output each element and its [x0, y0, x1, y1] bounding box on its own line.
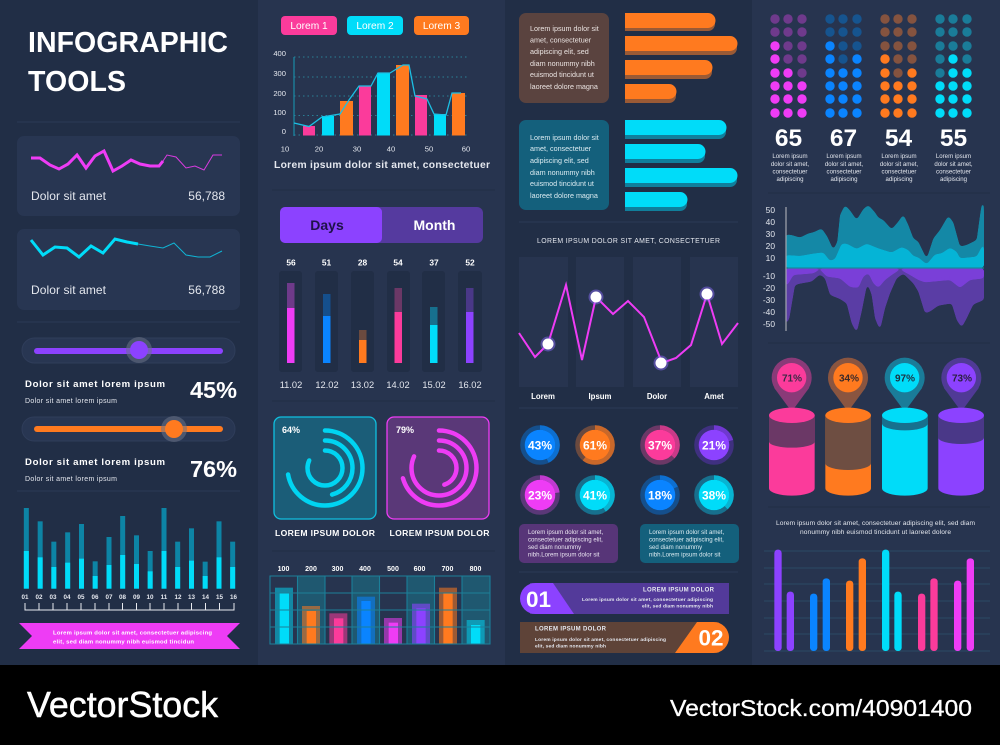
cylinder: 73%	[938, 358, 984, 496]
combo chart: 50	[425, 144, 433, 154]
percentage circles: 61%	[583, 438, 607, 452]
area chart: 30	[766, 229, 775, 239]
banner 02	[520, 622, 729, 653]
panel: orange text box: diam nonummy nibh	[530, 59, 595, 68]
text box: purple: consectetuer adipiscing elit,	[528, 536, 603, 544]
combo chart: 10	[281, 144, 289, 154]
bar chart: sixteen cyan bars	[21, 508, 237, 610]
bar chart: sixteen cyan bars: 04	[63, 594, 71, 601]
legend buttons: Lorem 2	[356, 21, 394, 32]
cylinder: 97%: 97%	[895, 374, 915, 384]
radial chart card: 79%: 79%	[396, 425, 414, 435]
bar chart: sixteen cyan bars: 13	[188, 594, 195, 601]
daily progress bars: 14.02	[386, 380, 410, 390]
bar chart: sixteen cyan bars: 08	[119, 594, 126, 601]
daily progress bars: 37	[429, 258, 439, 268]
panel: magenta sparkline card	[17, 136, 240, 216]
line chart with highlighted points	[519, 238, 738, 401]
text box: teal: consectetuer adipiscing elit,	[649, 536, 724, 544]
area chart: -40	[763, 307, 775, 317]
panel: cyan sparkline card: Dolor sit amet	[31, 283, 107, 297]
line chart with highlighted points: Amet	[704, 392, 724, 401]
daily progress bars: 54	[393, 258, 403, 268]
dot matrix: 55: dolor sit amet,	[934, 161, 973, 168]
panel: orange text box: laoreet dolore magna	[530, 82, 598, 91]
area chart	[763, 203, 984, 333]
panel: orange text box: euismod tincidunt ut	[530, 70, 594, 79]
dot matrix: 54	[880, 14, 918, 183]
grid bar chart: 200	[305, 566, 317, 573]
panel: cyan text box: euismod tincidunt ut	[530, 179, 594, 188]
grid bar chart: 300	[332, 566, 343, 573]
cylinder: 34%: 34%	[839, 374, 859, 384]
dot matrix: 55: adipiscing	[940, 176, 967, 183]
ribbon banner: elit, sed diam nonummy nibh euismod tincidun	[53, 640, 194, 646]
combo chart: 200	[273, 89, 286, 98]
percentage circles: 37%	[648, 438, 672, 452]
panel: orange slider: Dolor sit amet lorem ipsum	[25, 457, 165, 468]
dot matrix: 67: Lorem ipsum	[826, 153, 862, 160]
dot matrix: 54: dolor sit amet,	[880, 161, 918, 168]
grid bar chart: 700	[442, 566, 453, 573]
dot matrix: 65: Lorem ipsum	[772, 153, 808, 160]
dot matrix: 65: 65	[775, 125, 802, 152]
text box: teal	[640, 524, 739, 563]
dot matrix: 54: Lorem ipsum	[881, 153, 917, 160]
combo chart: 100	[273, 108, 286, 117]
dot matrix: 55: 55	[940, 125, 967, 152]
title: TOOLS	[28, 66, 126, 98]
bar chart: sixteen cyan bars: 11	[161, 594, 168, 601]
combo chart: 0	[282, 127, 286, 136]
line chart with highlighted points: Ipsum	[589, 392, 612, 401]
legend buttons: Lorem 1	[290, 21, 328, 32]
panel: orange text box: adipiscing elit, sed	[530, 47, 589, 56]
bar chart: sixteen cyan bars: 03	[49, 594, 57, 601]
bar chart: cyan horizontal bars	[625, 120, 738, 211]
line chart with highlighted points: Lorem	[531, 392, 555, 401]
daily progress bars: 28	[358, 258, 367, 268]
footer bar: VectorStock.com/40901400	[670, 695, 972, 721]
panel: purple slider: Dolor sit amet lorem ipsum	[25, 398, 117, 405]
grid bar chart	[270, 566, 490, 644]
radial chart card: 64%: 64%	[282, 425, 300, 435]
dot matrix: 67: consectetuer	[827, 168, 861, 176]
cylinder: 71%	[769, 358, 815, 496]
dot matrix: 65	[770, 14, 809, 183]
panel: cyan sparkline card: 56,788	[188, 283, 225, 297]
panel: cyan text box: amet, consectetuer	[530, 144, 592, 153]
toggle: days and month: Days	[310, 217, 344, 233]
panel: orange slider: 76%	[190, 456, 237, 482]
line chart with highlighted points: LOREM IPSUM DOLOR SIT AMET, CONSECTETUER	[537, 238, 720, 245]
grid bar chart: 100	[278, 566, 289, 573]
grid bar chart: 500	[387, 566, 399, 573]
dot matrix: 67	[825, 14, 863, 183]
panel: orange text box: amet, consectetuer	[530, 36, 592, 44]
radial chart card: 64%: LOREM IPSUM DOLOR	[275, 528, 376, 538]
panel: purple slider	[22, 337, 237, 405]
area chart: 20	[766, 241, 775, 251]
toggle: days and month	[280, 207, 483, 243]
bar chart: sixteen cyan bars: 10	[146, 594, 154, 601]
ribbon banner	[19, 623, 240, 649]
bar chart: sixteen cyan bars: 15	[216, 594, 223, 601]
bar chart: sixteen cyan bars: 06	[91, 594, 99, 601]
grid bar chart: 800	[470, 566, 481, 573]
footer bar	[0, 665, 1000, 745]
banner 02: Lorem ipsum dolor sit amet, consectetuer adipiscing	[535, 637, 666, 643]
text box: purple: nibh.Lorem ipsum dolor sit	[528, 552, 600, 558]
banner 01: Lorem ipsum dolor sit amet, consectetuer adipiscing	[582, 597, 713, 603]
bar chart: sixteen cyan bars: 07	[105, 594, 113, 601]
panel: orange slider	[22, 416, 237, 483]
banner 01: 01	[526, 587, 551, 612]
text block: bar chart caption	[776, 520, 976, 536]
panel: magenta sparkline card: 56,788	[188, 189, 225, 203]
area chart: -20	[763, 283, 775, 293]
footer bar: VectorStock	[27, 684, 219, 725]
panel: cyan text box: Lorem ipsum dolor sit	[530, 133, 599, 142]
combo chart: Lorem ipsum dolor sit amet, consectetuer	[274, 160, 490, 171]
panel: orange text box	[519, 13, 609, 103]
panel: purple slider: Dolor sit amet lorem ipsum	[25, 379, 165, 390]
legend buttons: Lorem 3	[423, 21, 461, 32]
percentage circles	[522, 428, 732, 512]
panel: cyan text box: diam nonummy nibh	[530, 168, 595, 177]
dot matrix: 54: adipiscing	[885, 176, 913, 183]
text box: teal: sed diam nonummy	[649, 544, 703, 551]
bar chart: sixteen cyan bars: 05	[77, 594, 85, 601]
percentage circles: 43%	[528, 438, 552, 452]
dot matrix: 65: consectetuer	[773, 168, 807, 176]
panel: orange slider: Dolor sit amet lorem ipsum	[25, 476, 117, 483]
daily progress bars: 15.02	[422, 380, 446, 390]
panel: magenta sparkline card: Dolor sit amet	[31, 189, 107, 203]
daily progress bars	[279, 258, 482, 390]
ribbon banner: Lorem ipsum dolor sit amet, consectetuer adipiscing	[53, 630, 212, 636]
daily progress bars: 12.02	[315, 380, 339, 390]
bar chart: sixteen cyan bars: 12	[174, 594, 182, 601]
text box: purple: Lorem ipsum dolor sit amet,	[528, 529, 603, 536]
daily progress bars: 56	[286, 258, 296, 268]
panel: cyan text box: laoreet dolore magna	[530, 191, 598, 200]
banner 02: LOREM IPSUM DOLOR	[535, 626, 607, 632]
percentage circles: 18%	[648, 488, 672, 502]
line chart with highlighted points: Dolor	[647, 392, 667, 401]
dot matrix: 65: dolor sit amet,	[771, 161, 809, 168]
text block: bar chart caption: nonummy nibh euismod tincidunt ut laoreet dolore	[800, 529, 951, 536]
combo chart	[273, 49, 490, 171]
dot matrix: 67: 67	[830, 125, 857, 152]
percentage circles: 38%	[702, 488, 726, 502]
title: INFOGRAPHIC	[28, 27, 228, 59]
percentage circles: 23%	[528, 488, 552, 502]
dot matrix: 55	[934, 14, 973, 183]
percentage circles: 21%	[702, 438, 726, 452]
daily progress bars: 11.02	[280, 380, 302, 390]
combo chart: 300	[273, 69, 286, 78]
banner 02: 02	[698, 626, 724, 650]
text box: teal: nibh.Lorem ipsum dolor sit	[649, 552, 721, 558]
area chart: 50	[766, 205, 775, 215]
cylinder: 73%: 73%	[952, 374, 972, 384]
radial chart card: 79%	[387, 417, 490, 538]
bar chart: sixteen cyan bars: 16	[230, 594, 237, 601]
text box: purple: sed diam nonummy	[528, 544, 582, 551]
combo chart: 30	[353, 144, 361, 154]
bar chart: sixteen cyan bars: 09	[133, 594, 140, 601]
dot matrix: 55: consectetuer	[936, 168, 971, 176]
radial chart card: 64%	[274, 417, 376, 538]
panel: orange text box: Lorem ipsum dolor sit	[530, 24, 599, 33]
combo chart: 20	[315, 144, 323, 154]
panel: cyan text box: adipiscing elit, sed	[530, 156, 589, 165]
dot matrix: 55: Lorem ipsum	[936, 153, 971, 160]
daily progress bars: 16.02	[458, 380, 482, 390]
area chart: -30	[763, 295, 775, 305]
percentage circles: 41%	[583, 488, 607, 502]
bar chart: sixteen cyan bars: 14	[202, 594, 209, 601]
grid bar chart: 600	[414, 566, 425, 573]
combo chart: 40	[387, 144, 395, 154]
dot matrix: 54: consectetuer	[882, 168, 916, 176]
panel: cyan sparkline card	[17, 229, 240, 310]
bar chart: rounded paired bars	[764, 550, 990, 651]
text box: teal: Lorem ipsum dolor sit amet,	[649, 529, 724, 536]
area chart: -50	[763, 319, 775, 329]
bar chart: sixteen cyan bars: 01	[21, 594, 29, 601]
combo chart: 400	[273, 49, 286, 58]
cylinder: 97%	[882, 358, 928, 496]
banner 01	[520, 583, 729, 614]
dot matrix: 67: dolor sit amet,	[825, 161, 863, 168]
dot matrix: 67: adipiscing	[830, 176, 858, 183]
text box: purple	[519, 524, 618, 563]
legend buttons	[281, 16, 469, 35]
daily progress bars: 51	[322, 258, 331, 268]
cylinder: 34%	[825, 358, 871, 496]
toggle: days and month: Month	[414, 217, 455, 233]
banner 01: LOREM IPSUM DOLOR	[643, 588, 715, 594]
dot matrix: 54: 54	[885, 125, 912, 152]
title	[28, 27, 228, 98]
dot matrix: 65: adipiscing	[776, 176, 804, 183]
text block: bar chart caption: Lorem ipsum dolor sit amet, consectetuer adipiscing elit, sed diam	[776, 520, 976, 527]
panel: purple slider: 45%	[190, 377, 237, 403]
combo chart: 60	[462, 144, 470, 154]
cylinder: 71%: 71%	[782, 374, 802, 384]
daily progress bars: 52	[465, 258, 475, 268]
banner 01: elit, sed diam nonummy nibh	[642, 604, 713, 610]
grid bar chart: 400	[359, 566, 371, 573]
area chart: 10	[766, 253, 775, 263]
area chart: -10	[763, 271, 775, 281]
bar chart: orange horizontal bars	[625, 13, 738, 103]
area chart: 40	[766, 217, 775, 227]
panel: cyan text box	[519, 120, 609, 210]
daily progress bars: 13.02	[351, 380, 374, 390]
radial chart card: 79%: LOREM IPSUM DOLOR	[390, 528, 490, 538]
bar chart: sixteen cyan bars: 02	[35, 594, 43, 601]
banner 02: elit, sed diam nonummy nibh	[535, 644, 606, 650]
